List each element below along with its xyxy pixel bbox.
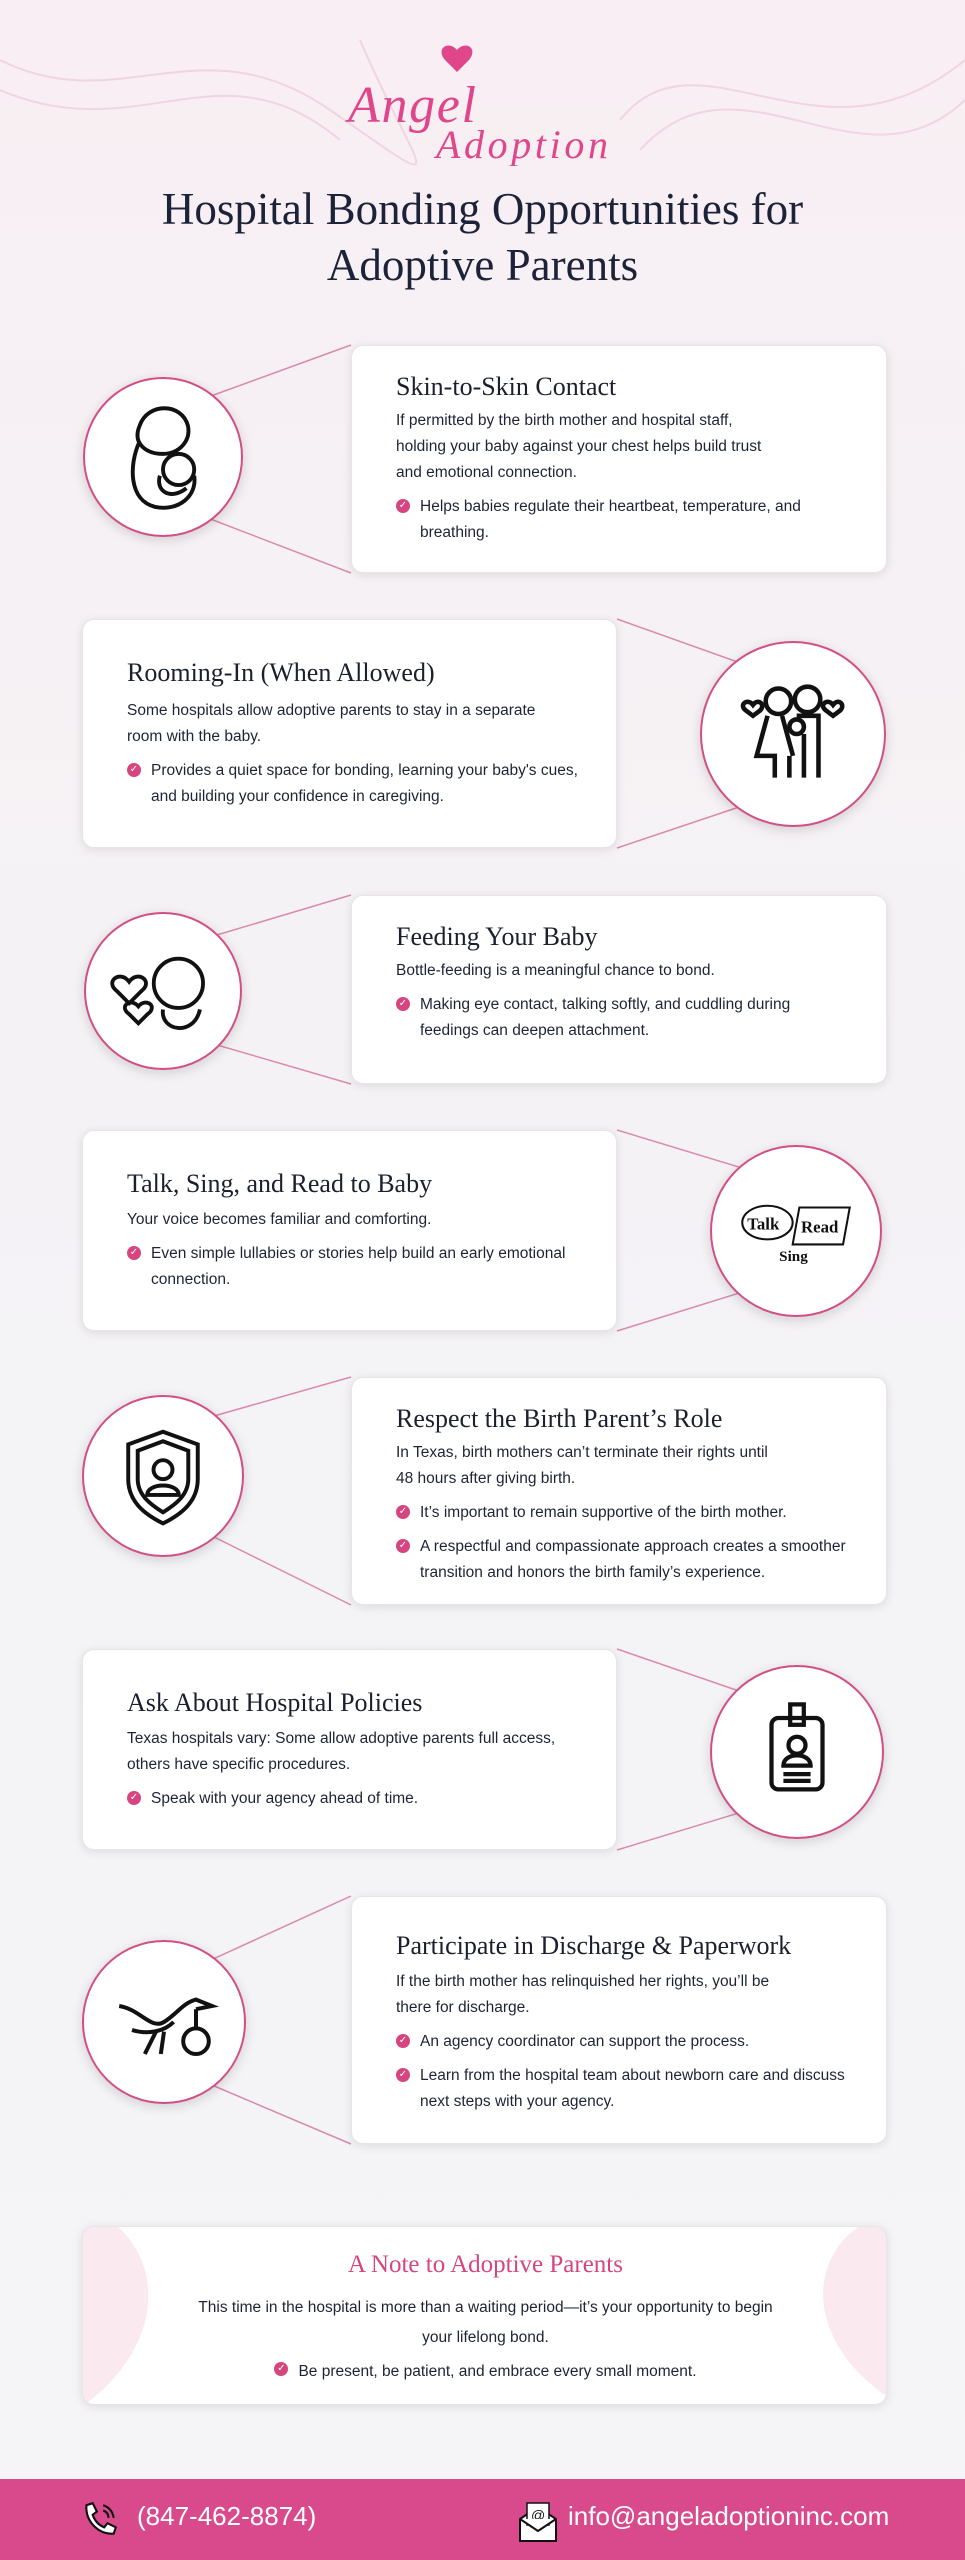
phone text: (847-462-8874) — [137, 2501, 316, 2531]
panel: skin-to-skin: holding your baby against your chest helps build trust — [396, 438, 761, 455]
panel: rooming-in: Provides a quiet space for bonding, learning your baby's cues, and building your confidence in caregiving. — [151, 762, 578, 805]
panel: talk sing read: Talk, Sing, and Read to Baby — [127, 1169, 432, 1198]
icon: family — [700, 641, 886, 827]
panel: talk sing read: Your voice becomes familiar and comforting. — [127, 1211, 431, 1228]
icon: id badge — [710, 1665, 884, 1839]
note text: This time in the hospital is more than a waiting period—it’s your opportunity to begin your lifelong bond. — [198, 2299, 773, 2346]
note text — [198, 2299, 773, 2380]
panel: discharge: If the birth mother has relinquished her rights, you’ll be — [396, 1973, 769, 1990]
icon: talk read sing: Sing — [779, 1249, 808, 1265]
icon: talk read sing: Read — [801, 1218, 839, 1237]
panel: respect birth parent — [351, 1377, 887, 1605]
icon: phone — [85, 2502, 117, 2535]
logo: Adoption — [433, 122, 608, 166]
logo: Angel — [345, 77, 476, 134]
panel: skin-to-skin: and emotional connection. — [396, 464, 577, 481]
icon: mother and baby — [83, 377, 243, 537]
footer — [0, 2479, 965, 2560]
panel: skin-to-skin: If permitted by the birth mother and hospital staff, — [396, 412, 733, 429]
panel: talk sing read — [82, 1130, 617, 1331]
panel: respect birth parent: It’s important to remain supportive of the birth mother. — [420, 1504, 787, 1521]
icon: talk read sing — [710, 1145, 882, 1317]
panel: rooming-in: room with the baby. — [127, 728, 261, 745]
icon: shield — [82, 1395, 244, 1557]
panel: respect birth parent: In Texas, birth mothers can’t terminate their rights until — [396, 1444, 768, 1461]
panel: hospital policies: Texas hospitals vary: Some allow adoptive parents full access, — [127, 1730, 555, 1747]
panel: discharge: Participate in Discharge & Paperwork — [396, 1931, 791, 1960]
icon: talk read sing: Talk — [747, 1214, 780, 1233]
email text: info@angeladoptioninc.com — [568, 2501, 889, 2531]
panel: discharge: An agency coordinator can support the process. — [420, 2033, 749, 2050]
panel: note to adoptive parents — [82, 2226, 887, 2405]
panel: hospital policies: Speak with your agency ahead of time. — [151, 1790, 418, 1807]
note title: A Note to Adoptive Parents — [348, 2251, 623, 2278]
icon: email: @ — [531, 2507, 545, 2523]
panel: skin-to-skin: Helps babies regulate their heartbeat, temperature, and breathing. — [420, 498, 801, 541]
panel: feeding — [351, 895, 887, 1084]
title: Adoptive Parents — [327, 240, 638, 290]
panel: hospital policies: Ask About Hospital Policies — [127, 1688, 422, 1717]
panel: feeding: Feeding Your Baby — [396, 922, 598, 951]
panel: rooming-in — [82, 619, 617, 848]
title: Hospital Bonding Opportunities for — [162, 184, 803, 234]
logo — [345, 46, 608, 166]
panel: rooming-in: Some hospitals allow adoptive parents to stay in a separate — [127, 702, 535, 719]
panel: feeding: Bottle-feeding is a meaningful chance to bond. — [396, 962, 715, 979]
icon: email — [519, 2502, 557, 2542]
panel: hospital policies — [82, 1649, 617, 1850]
panel: discharge: there for discharge. — [396, 1999, 530, 2016]
panel: rooming-in: Rooming-In (When Allowed) — [127, 658, 435, 687]
title — [162, 184, 803, 290]
icon: baby with hearts — [84, 912, 242, 1070]
panel: hospital policies: others have specific procedures. — [127, 1756, 350, 1773]
panel: skin-to-skin — [351, 345, 887, 573]
note text: Be present, be patient, and embrace every small moment. — [298, 2363, 697, 2380]
background wisps — [0, 40, 965, 166]
icon: stork — [82, 1940, 246, 2104]
panel: discharge — [351, 1896, 887, 2144]
panel: respect birth parent: A respectful and compassionate approach creates a smoother transition and honors the birth family’s experience. — [420, 1538, 846, 1581]
panel: respect birth parent: 48 hours after giving birth. — [396, 1470, 575, 1487]
panel: feeding: Making eye contact, talking softly, and cuddling during feedings can deepen attachment. — [420, 996, 790, 1039]
panel: discharge: Learn from the hospital team about newborn care and discuss next steps with your agency. — [420, 2067, 845, 2110]
panel: talk sing read: Even simple lullabies or stories help build an early emotional connection. — [151, 1245, 565, 1288]
panel: skin-to-skin: Skin-to-Skin Contact — [396, 372, 616, 401]
panel: respect birth parent: Respect the Birth Parent’s Role — [396, 1404, 722, 1433]
